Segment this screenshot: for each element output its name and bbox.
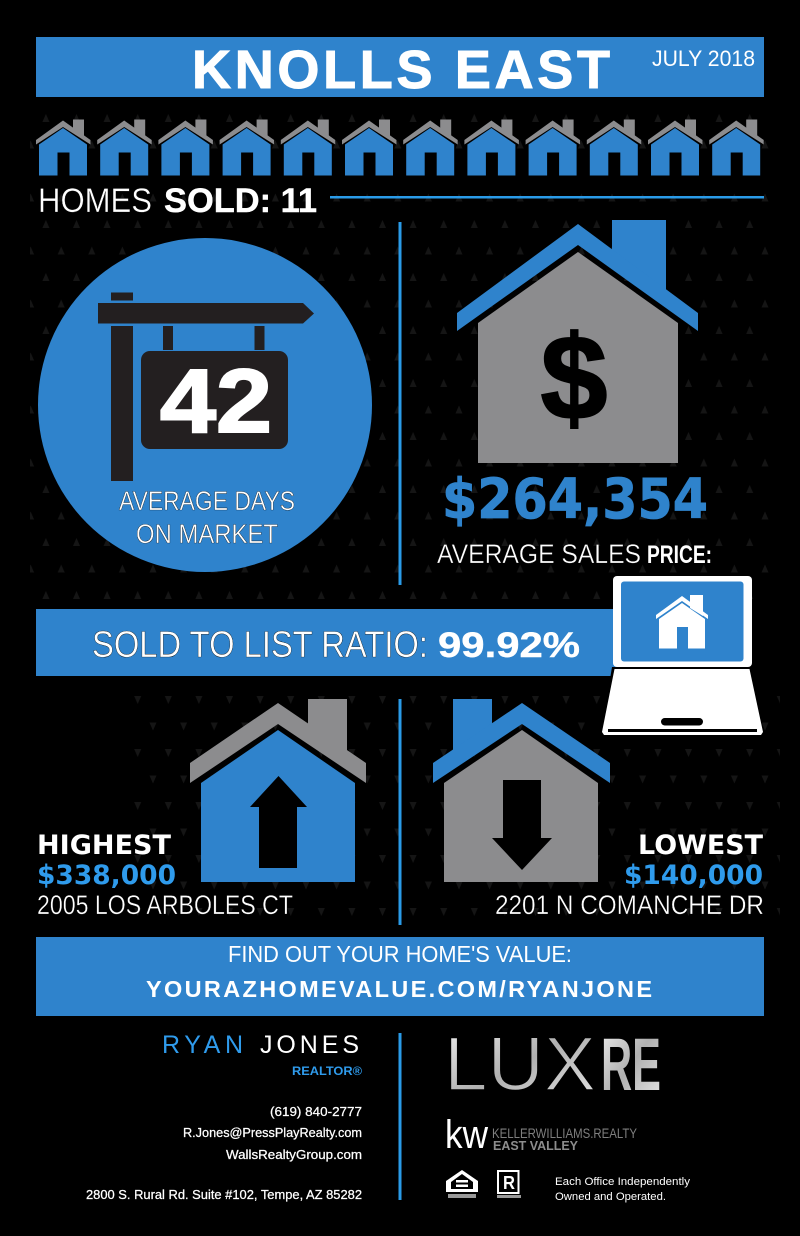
- logo: LUX RE: RE: [601, 1023, 661, 1106]
- icon: realtor mark: [497, 1171, 521, 1198]
- agent contact block: [86, 1031, 362, 1202]
- lowest address: 2201 N COMANCHE DR: [495, 890, 764, 920]
- office disclaimer: Each Office Independently: [555, 1176, 691, 1188]
- days caption: [119, 486, 295, 549]
- agent name: RYAN: [162, 1031, 243, 1059]
- icon: realtor mark: R: [503, 1173, 515, 1193]
- lowest price: $140,000: [624, 860, 763, 891]
- logo: Keller Williams: kw: [445, 1113, 488, 1157]
- logo: LUX RE: [444, 1022, 661, 1107]
- title: KNOLLS EAST: [192, 40, 610, 100]
- icon: laptop: [601, 576, 764, 736]
- icon: house with up arrow: [190, 699, 366, 882]
- icon: house with down arrow: [433, 699, 610, 882]
- call to action banner: YOURAZHOMEVALUE.COM/RYANJONE: [146, 976, 652, 1002]
- icon: for sale sign: [98, 292, 314, 481]
- agent name: [162, 1031, 359, 1059]
- heading rule: [330, 196, 764, 198]
- highest price: $338,000: [37, 860, 176, 891]
- icon: house with dollar: [457, 220, 698, 463]
- contact details: R.Jones@PressPlayRealty.com: [183, 1126, 362, 1140]
- homes sold heading: SOLD: 11: [164, 182, 317, 220]
- row of 11 sold house icons plus one: [36, 120, 764, 176]
- divider footer: [398, 1033, 402, 1200]
- panel: average days on market: [38, 238, 372, 572]
- icon: equal housing: [446, 1170, 478, 1198]
- divider top: [398, 222, 402, 585]
- panel: sold to list ratio: [36, 609, 626, 676]
- office disclaimer: Owned and Operated.: [555, 1191, 666, 1203]
- panel: sold to list ratio: 99.92%: [438, 626, 580, 665]
- highest label: HIGHEST: [37, 830, 172, 861]
- panel: highest sale: [37, 699, 366, 920]
- logo: Keller Williams: KELLERWILLIAMS.REALTY: [492, 1125, 638, 1141]
- call to action banner: [36, 937, 764, 1016]
- homes sold heading: HOMES: [38, 182, 152, 220]
- price: $264,354: [442, 467, 708, 531]
- highest address: 2005 LOS ARBOLES CT: [37, 890, 293, 920]
- homes sold heading: [38, 182, 317, 220]
- agent title: REALTOR®: [292, 1064, 362, 1078]
- logo: Keller Williams: [445, 1113, 638, 1157]
- lowest label: LOWEST: [638, 830, 764, 861]
- panel: sold to list ratio: SOLD TO LIST RATIO:: [92, 624, 428, 665]
- divider middle: [398, 699, 402, 925]
- title banner: [36, 37, 764, 100]
- agent name: JONES: [260, 1031, 359, 1059]
- icon: screen house: [656, 595, 708, 648]
- contact details: [86, 1105, 362, 1202]
- call to action banner: FIND OUT YOUR HOME'S VALUE:: [228, 941, 572, 967]
- days caption: AVERAGE DAYS: [119, 486, 295, 516]
- days number: 42: [160, 352, 272, 452]
- price caption: PRICE:: [647, 541, 712, 569]
- contact details: 2800 S. Rural Rd. Suite #102, Tempe, AZ 85282: [86, 1188, 362, 1202]
- days caption: ON MARKET: [136, 519, 278, 549]
- icon: house with dollar: $: [541, 311, 607, 445]
- date: JULY 2018: [652, 46, 755, 71]
- contact details: (619) 840-2777: [270, 1105, 362, 1119]
- price caption: AVERAGE SALES: [437, 539, 641, 569]
- panel: lowest sale: [433, 699, 764, 920]
- logo: LUX RE: LUX: [444, 1022, 596, 1107]
- logo: Keller Williams: EAST VALLEY: [493, 1139, 579, 1153]
- panel: average sales price: [437, 220, 712, 569]
- office disclaimer: [555, 1176, 691, 1203]
- contact details: WallsRealtyGroup.com: [226, 1148, 362, 1162]
